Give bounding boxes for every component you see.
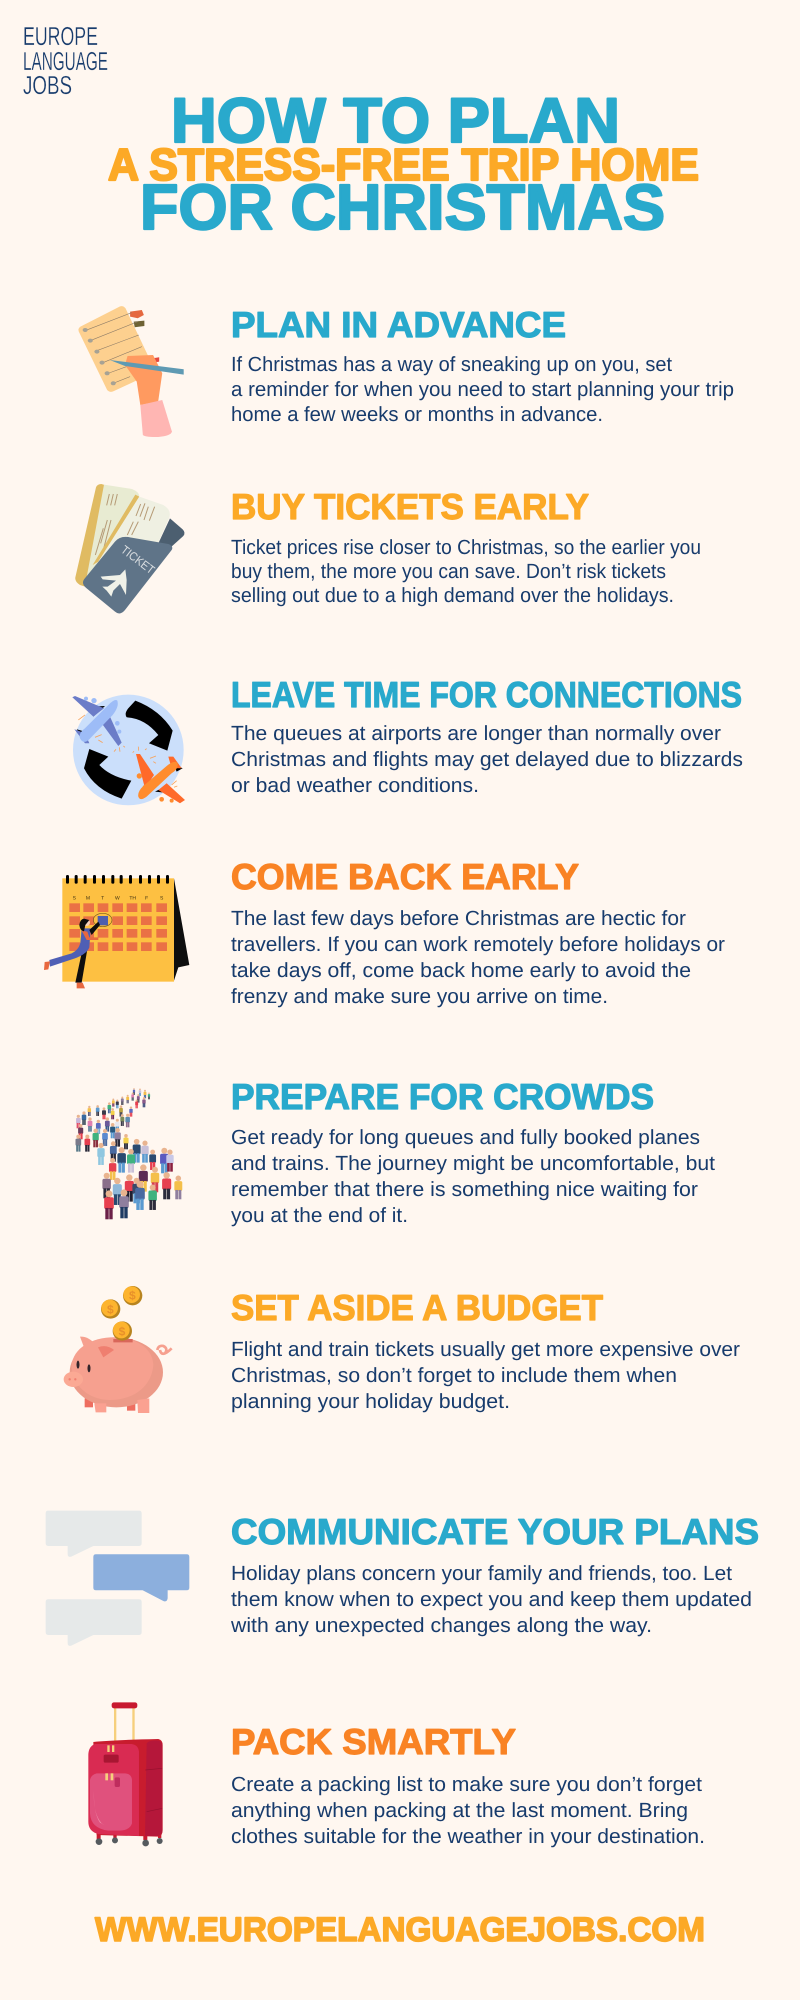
- panel: prepare for crowds: [75, 1076, 715, 1227]
- body text: take days off, come back home early to avoid the: [231, 959, 691, 982]
- body text: clothes suitable for the weather in your destination.: [231, 1825, 705, 1848]
- coins: [101, 1286, 142, 1341]
- body text: [231, 722, 743, 797]
- panel: set aside a budget: [64, 1286, 740, 1413]
- body text: Flight and train tickets usually get more expensive over: [231, 1338, 740, 1361]
- icon: circling planes: [72, 695, 185, 805]
- body text: home a few weeks or months in advance.: [231, 403, 603, 426]
- body text: [231, 353, 734, 426]
- panel: come back early: [44, 856, 725, 1008]
- body text: them know when to expect you and keep them updated: [231, 1588, 752, 1611]
- icon: calendar with person: M: [86, 895, 90, 901]
- logo: Europe Language Jobs: JOBS: [23, 70, 72, 100]
- heading: PREPARE FOR CROWDS: [231, 1076, 654, 1117]
- heading: SET ASIDE A BUDGET: [231, 1287, 603, 1328]
- panel: pack smartly: [88, 1702, 705, 1848]
- icon: calendar with person: TH: [129, 895, 136, 901]
- body text: [231, 536, 701, 607]
- body text: Create a packing list to make sure you don’t forget: [231, 1773, 702, 1796]
- title: A STRESS-FREE TRIP HOME: [108, 139, 699, 190]
- heading: PACK SMARTLY: [231, 1721, 516, 1762]
- body text: [230, 1562, 752, 1637]
- body text: The queues at airports are longer than normally over: [231, 722, 721, 745]
- body text: with any unexpected changes along the way.: [230, 1614, 652, 1637]
- logo: Europe Language Jobs: EUROPE: [23, 21, 98, 51]
- body text: planning your holiday budget.: [231, 1390, 510, 1413]
- website url: WWW.EUROPELANGUAGEJOBS.COM: [95, 1911, 705, 1949]
- panel: buy tickets early: [75, 484, 701, 613]
- icon: plane tickets: TICKET: [118, 543, 157, 577]
- orange plane: [136, 754, 185, 803]
- body text: [231, 1773, 705, 1848]
- coins: $: [129, 1289, 136, 1302]
- body text: and trains. The journey might be uncomfortable, but: [231, 1152, 715, 1175]
- icon: calendar with person: [44, 875, 189, 988]
- title: HOW TO PLAN: [171, 86, 620, 156]
- icon: calendar with person: S: [160, 895, 163, 901]
- blue plane: [72, 696, 122, 746]
- icon: calendar with person: F: [145, 895, 148, 901]
- body text: or bad weather conditions.: [231, 774, 479, 797]
- heading: COME BACK EARLY: [231, 856, 579, 897]
- icon: calendar with person: W: [115, 895, 120, 901]
- body text: Christmas and flights may get delayed due to blizzards: [231, 748, 743, 771]
- body text: Holiday plans concern your family and friends, too. Let: [231, 1562, 732, 1585]
- body text: The last few days before Christmas are hectic for: [231, 907, 686, 930]
- title: [108, 86, 699, 243]
- body text: Get ready for long queues and fully booked planes: [231, 1126, 700, 1149]
- body text: frenzy and make sure you arrive on time.: [231, 985, 608, 1008]
- coins: $: [107, 1302, 114, 1316]
- heading: COMMUNICATE YOUR PLANS: [231, 1511, 759, 1552]
- body text: [231, 907, 725, 1008]
- icon: plane tickets: [75, 484, 185, 613]
- body text: anything when packing at the last moment. Bring: [231, 1799, 688, 1822]
- logo: Europe Language Jobs: [23, 21, 108, 100]
- heading: LEAVE TIME FOR CONNECTIONS: [231, 674, 742, 715]
- icon: notebook and hand with pen: [78, 306, 184, 437]
- panel: leave time for connections: [72, 674, 743, 805]
- body text: Ticket prices rise closer to Christmas, so the earlier you: [231, 536, 701, 559]
- body text: If Christmas has a way of sneaking up on you, set: [231, 353, 672, 376]
- person: [44, 919, 100, 988]
- panel: communicate your plans: [46, 1511, 759, 1646]
- icon: speech bubbles: [46, 1511, 189, 1646]
- icon: calendar with person: T: [101, 895, 104, 901]
- body text: Christmas, so don’t forget to include them when: [231, 1364, 677, 1387]
- panel: plan in advance: [78, 304, 734, 437]
- heading: BUY TICKETS EARLY: [231, 486, 589, 527]
- coins: $: [119, 1324, 125, 1338]
- icon: red suitcase: [88, 1702, 163, 1846]
- body text: [231, 1338, 740, 1413]
- icon: calendar with person: S: [73, 895, 76, 901]
- heading: PLAN IN ADVANCE: [231, 304, 566, 345]
- body text: buy them, the more you can save. Don’t risk tickets: [231, 560, 666, 583]
- body text: you at the end of it.: [231, 1204, 408, 1227]
- body text: remember that there is something nice waiting for: [231, 1178, 698, 1201]
- icon: queue of people: [75, 1088, 182, 1219]
- title: FOR CHRISTMAS: [140, 171, 665, 243]
- body text: a reminder for when you need to start planning your trip: [231, 378, 734, 401]
- logo: Europe Language Jobs: LANGUAGE: [23, 46, 108, 76]
- body text: [231, 1126, 715, 1227]
- icon: piggy bank with coins: [64, 1286, 172, 1413]
- body text: selling out due to a high demand over the holidays.: [231, 584, 674, 607]
- body text: travellers. If you can work remotely before holidays or: [231, 933, 725, 956]
